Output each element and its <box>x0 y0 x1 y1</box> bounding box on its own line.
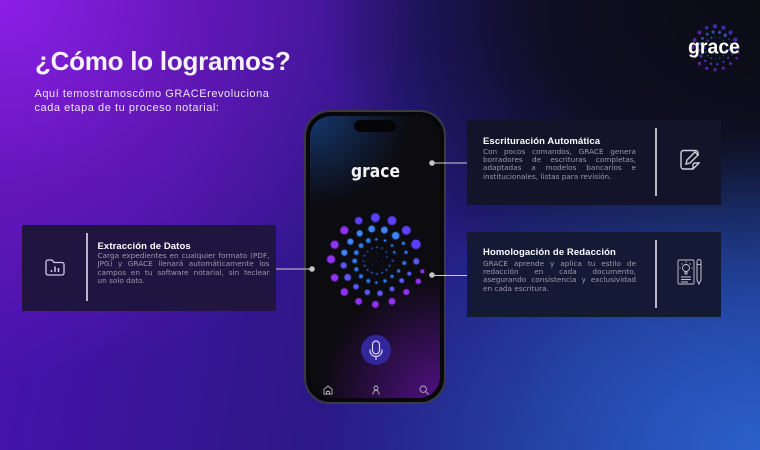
panel body text: adaptadas a modelos bancarios e <box>483 163 636 172</box>
panel body text <box>483 258 636 293</box>
panel body text: GRACE aprende y aplica tu estilo de <box>483 258 636 268</box>
panel heading: Extracción de Datos <box>98 240 191 252</box>
panel body text: en cada escritura. <box>483 284 549 293</box>
panel body text: borradores de escrituras completas, <box>483 155 636 164</box>
panel heading: Homologación de Redacción <box>483 247 616 258</box>
logo: grace top right <box>688 24 740 72</box>
icon: folder chart <box>45 259 65 276</box>
panel body text: asegurando consistencia y exclusividad <box>483 275 636 284</box>
panel body text: Con pocos comandos, GRACE genera <box>483 146 636 156</box>
panel: Extracción de Datos <box>22 225 276 311</box>
logo: grace top right: grace <box>688 36 740 58</box>
connector: Homologación <box>429 272 467 278</box>
panel body text: un solo dato. <box>98 276 145 285</box>
panel body text: institucionales, listas para revisión. <box>483 172 612 181</box>
panel body text: JPG) y GRACE llenará automáticamente los <box>98 259 270 268</box>
phone body <box>304 110 446 404</box>
panel heading: Escrituración Automática <box>483 136 600 146</box>
connector: Extracción <box>276 266 315 272</box>
subtitle <box>34 88 269 114</box>
phone <box>304 110 446 404</box>
panel: Homologación de Redacción <box>467 232 721 317</box>
panel body text <box>97 251 270 285</box>
panel body text <box>483 146 636 181</box>
phone screen <box>310 116 440 398</box>
microphone button <box>361 335 391 365</box>
icon: search <box>420 386 429 395</box>
icon: edit note <box>680 150 700 170</box>
icon: document with bulb and pencil <box>678 259 702 285</box>
subtitle: cada etapa de tu proceso notarial: <box>34 102 220 114</box>
icon: user <box>372 386 380 395</box>
panel body text: redacción en cada documento, <box>483 267 636 276</box>
panel body text: campos en tu software notarial, sin teclear <box>98 268 270 277</box>
panel body text: Carga expedientes en cualquier formato (PDF, <box>98 251 270 260</box>
phone logo: grace: grace <box>351 161 400 182</box>
subtitle: Aquí temostramoscómo GRACErevoluciona <box>34 88 269 100</box>
panel: Escrituración Automática <box>467 120 721 205</box>
icon: home <box>324 386 332 394</box>
title: ¿Cómo lo logramos? <box>35 46 290 76</box>
dot radial visual <box>326 212 426 308</box>
phone notch <box>354 120 396 132</box>
connector: Escrituración <box>429 160 467 166</box>
